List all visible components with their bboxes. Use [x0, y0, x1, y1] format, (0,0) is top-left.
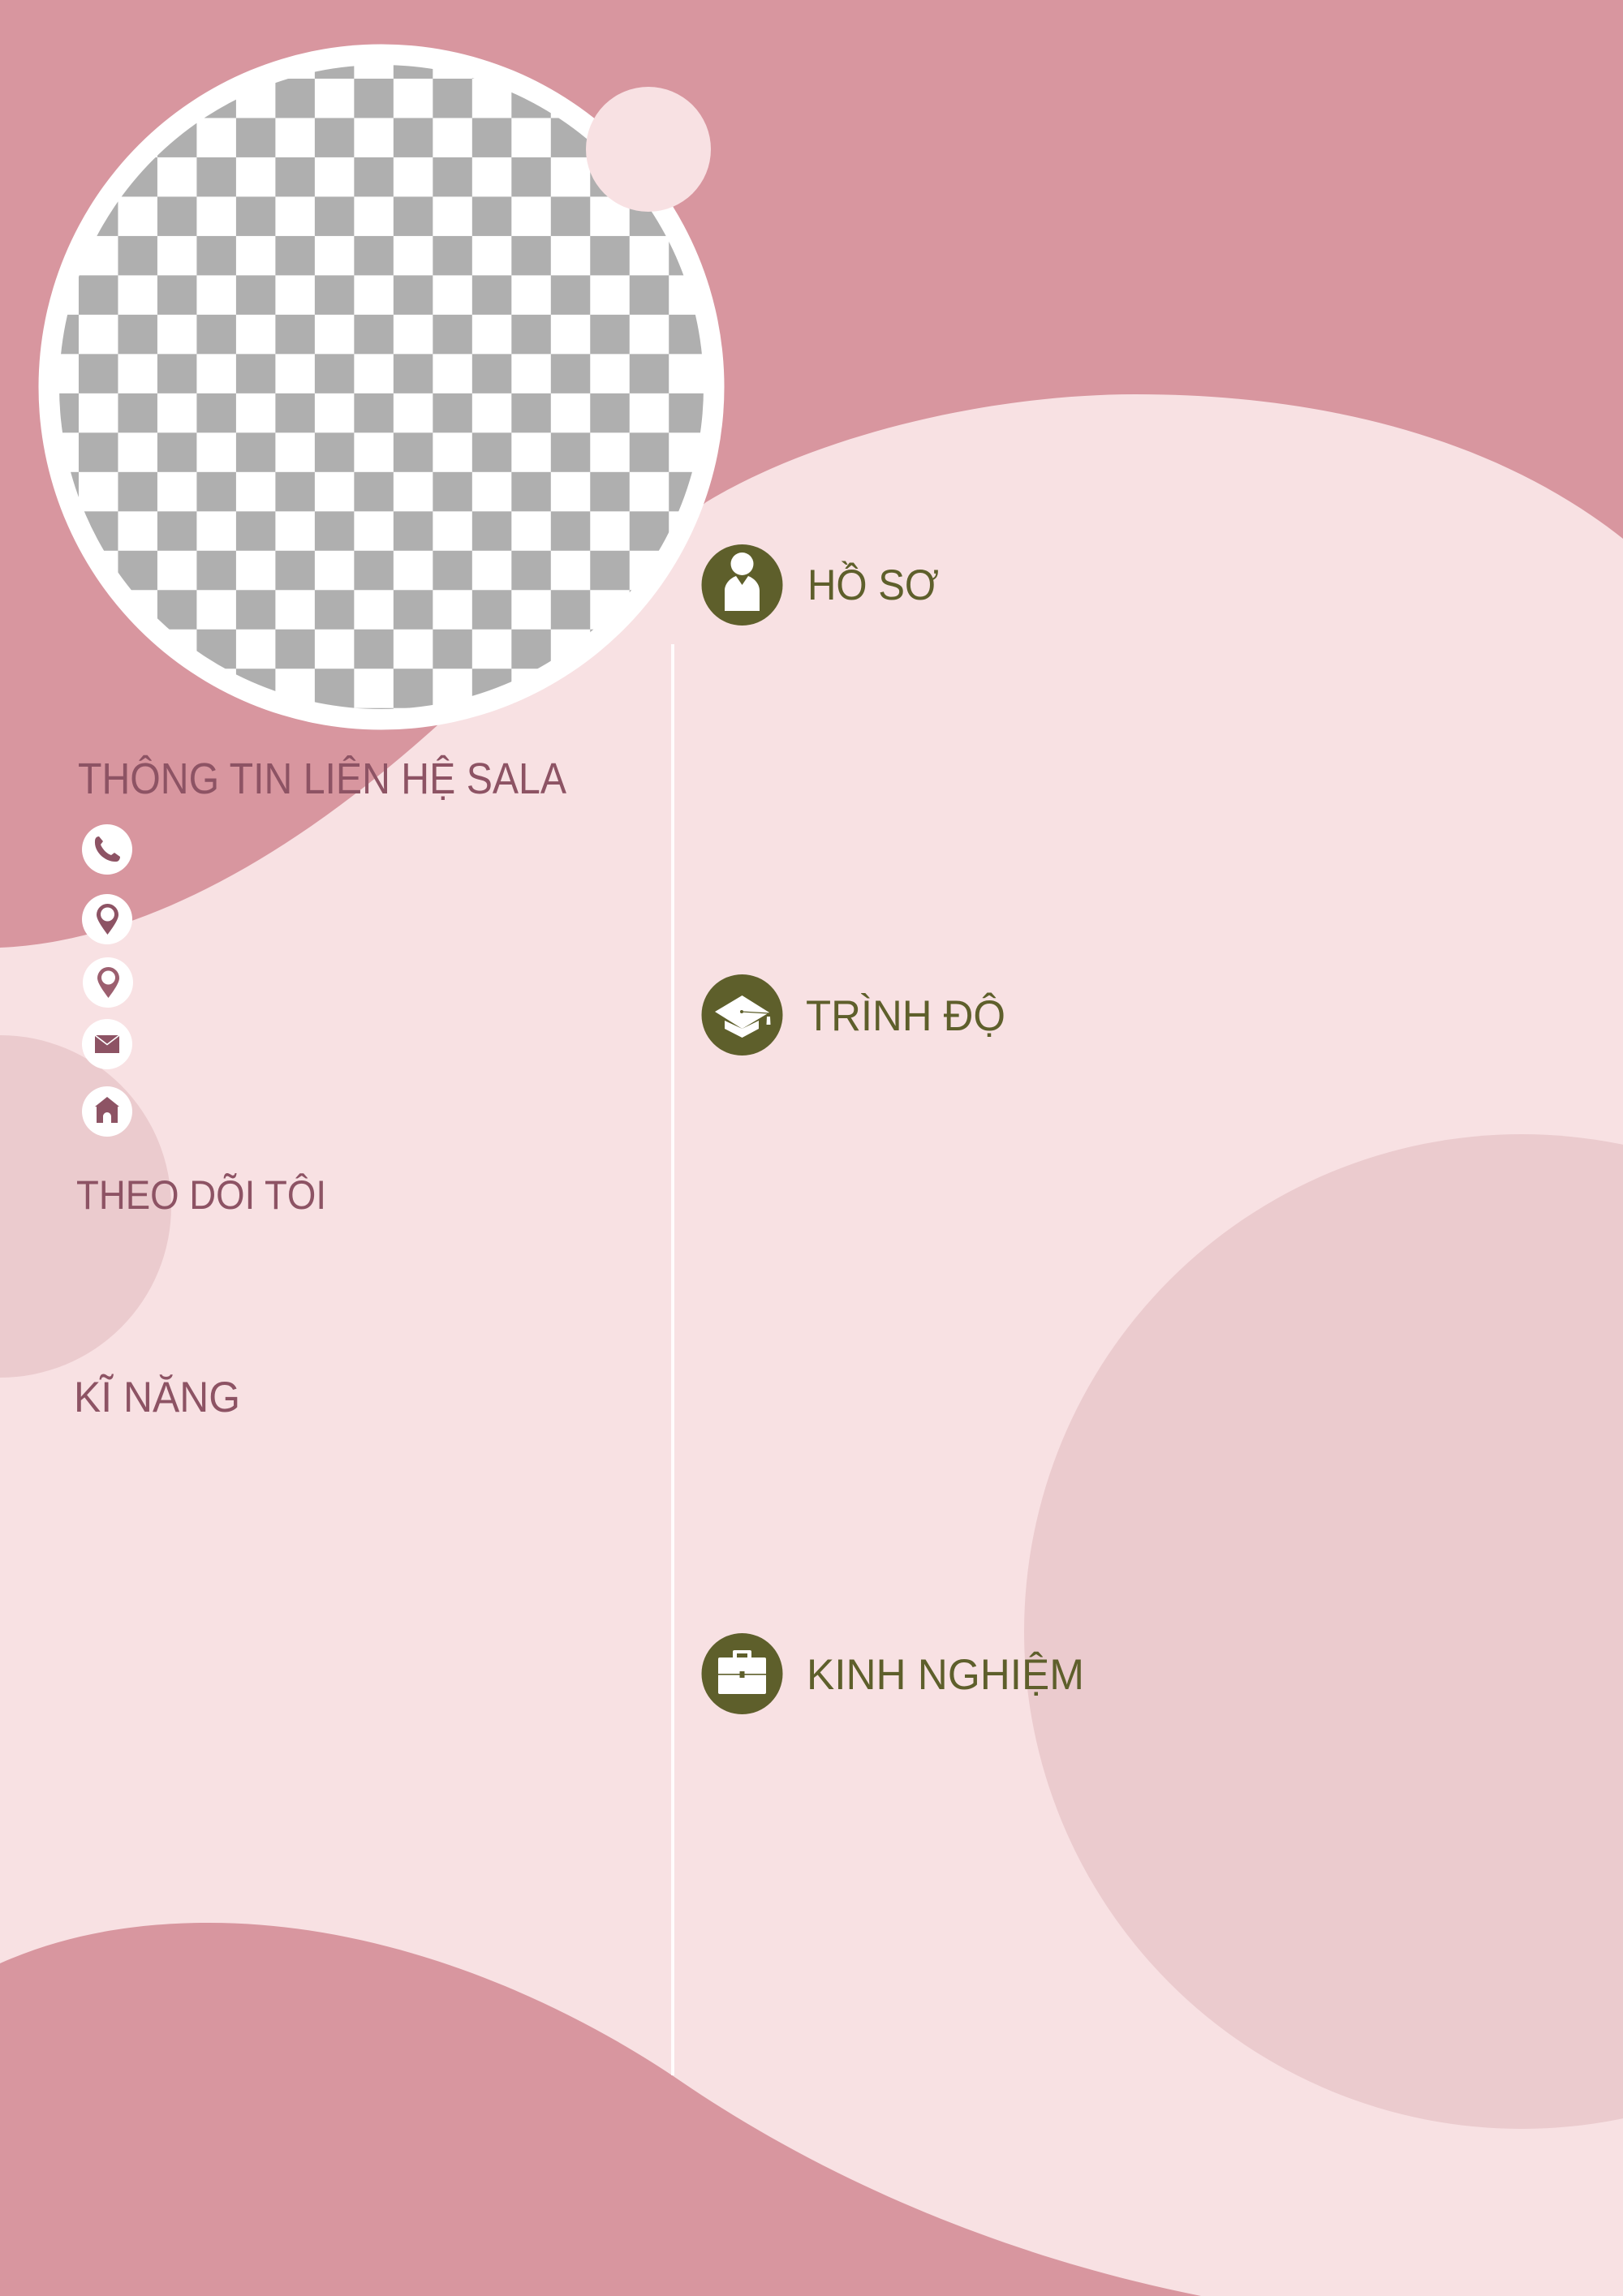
decorative circle: large right [1024, 1134, 1623, 2129]
background: top dark pink shape [0, 0, 1623, 948]
heading: follow me: THEO DÕI TÔI [76, 1172, 326, 1218]
heading: experience: KINH NGHIỆM [807, 1651, 1084, 1699]
icon: location pin 2 [83, 957, 133, 1008]
small accent circle [586, 87, 711, 212]
icon: location pin 1 [82, 894, 132, 944]
icon: phone [82, 824, 132, 875]
heading: contact: THÔNG TIN LIÊN HỆ SALA [78, 755, 566, 803]
heading: education: TRÌNH ĐỘ [806, 991, 1005, 1040]
icon: profile person [701, 544, 782, 626]
icon: envelope [82, 1019, 132, 1069]
icon: house [82, 1086, 132, 1137]
heading: skills: KĨ NĂNG [74, 1374, 240, 1421]
photo placeholder [39, 44, 724, 730]
decorative circle: small left [0, 1035, 171, 1378]
background: bottom dark pink wave [0, 1923, 1201, 2296]
icon: briefcase [701, 1633, 782, 1714]
heading: profile: HỒ SƠ [807, 561, 939, 609]
icon: graduation cap [701, 974, 782, 1056]
vertical divider [671, 644, 674, 2075]
